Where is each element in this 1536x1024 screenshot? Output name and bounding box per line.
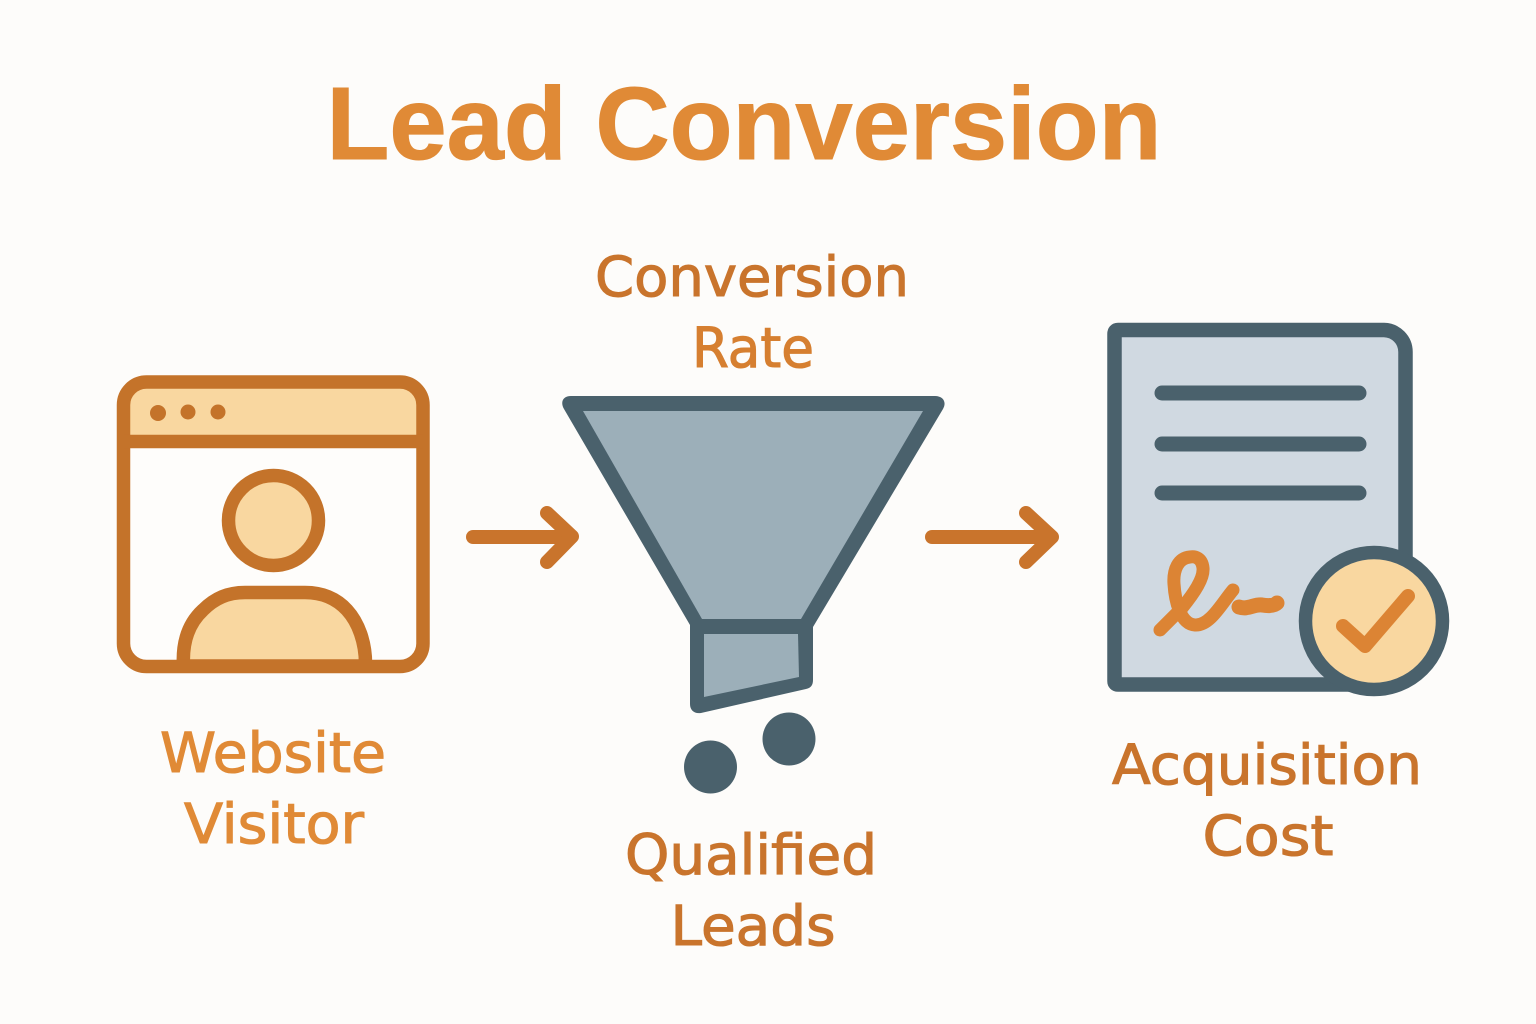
- label: acquisition cost: [1112, 733, 1422, 868]
- icon: signed contract document: [1114, 330, 1442, 690]
- icon: website visitor browser: [124, 382, 423, 666]
- document lines: [1162, 393, 1359, 493]
- label: website visitor: Visitor: [184, 792, 364, 856]
- arrow: funnel to contract: [932, 513, 1052, 562]
- title: Lead Conversion: [326, 66, 1162, 181]
- arrow: visitor to funnel: [473, 513, 572, 562]
- label: website visitor: [160, 721, 386, 856]
- label: acquisition cost: Acquisition: [1112, 733, 1422, 797]
- label: conversion rate: Rate: [692, 316, 814, 380]
- lead dot right: [762, 712, 816, 766]
- visitor head: [228, 476, 318, 566]
- label: acquisition cost: Cost: [1202, 804, 1334, 868]
- label: qualified leads: Leads: [670, 894, 836, 958]
- label: website visitor: Website: [160, 721, 386, 785]
- check badge: [1306, 552, 1442, 690]
- lead dot left: [684, 740, 737, 794]
- label: conversion rate: Conversion: [595, 245, 909, 309]
- label: qualified leads: [625, 823, 877, 958]
- label: qualified leads: Qualified: [625, 823, 877, 887]
- signature: [1160, 557, 1277, 630]
- icon: funnel: [562, 396, 945, 794]
- label: conversion rate: [595, 245, 909, 380]
- visitor body: [183, 592, 366, 666]
